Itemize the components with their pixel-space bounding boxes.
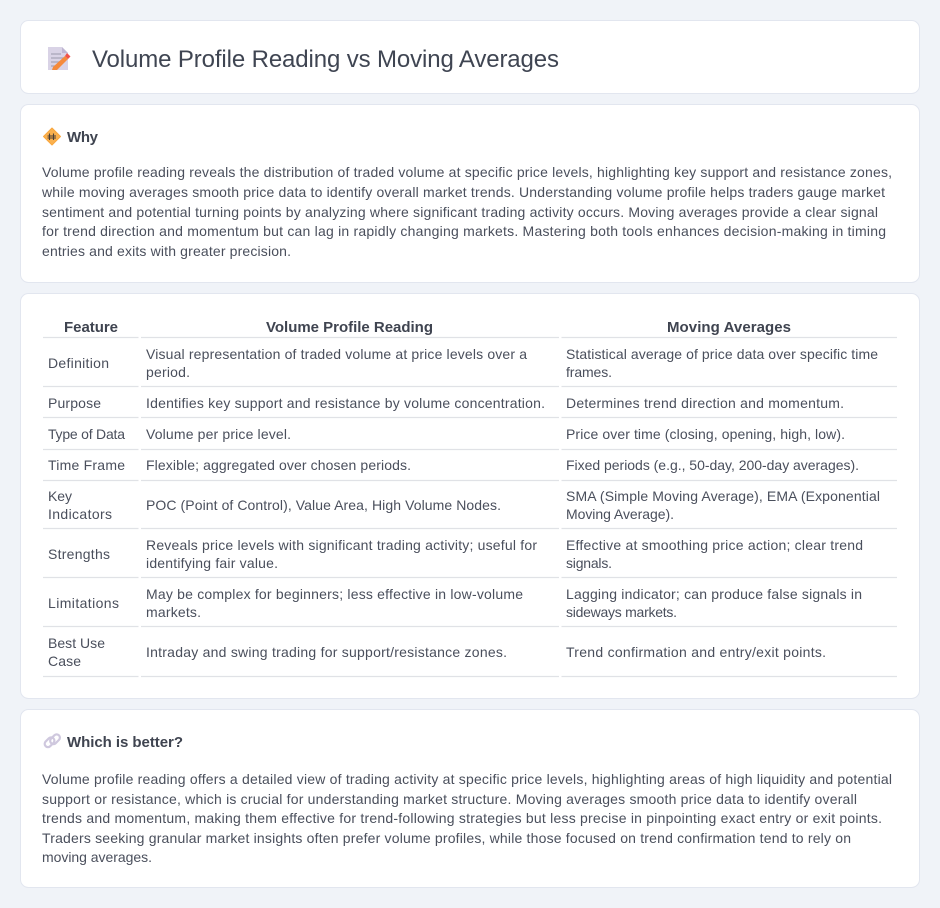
row: key indicators: SMA (Simple Moving Average), EMA (Exponential bbox=[566, 488, 880, 504]
row: type of data: Type of Data bbox=[48, 426, 125, 442]
row: strengths: signals. bbox=[566, 555, 612, 571]
text block: which is better paragraph: Volume profile reading offers a detailed view of trading activity at specific price levels, highlighting areas of high liquidity and potential bbox=[42, 771, 892, 787]
row: type of data: Price over time (closing, opening, high, low). bbox=[566, 426, 845, 442]
row: key indicators: Indicators bbox=[48, 506, 112, 522]
row: definition: Visual representation of traded volume at price levels over a bbox=[146, 346, 527, 362]
panel: why bbox=[20, 104, 920, 282]
row: purpose: Determines trend direction and momentum. bbox=[566, 395, 844, 411]
row: time frame bbox=[48, 457, 859, 473]
row: best use case bbox=[48, 635, 826, 669]
row: purpose: Identifies key support and resistance by volume concentration. bbox=[146, 395, 545, 411]
text block: why paragraph bbox=[41, 164, 892, 259]
row: time frame: Flexible; aggregated over chosen periods. bbox=[146, 457, 411, 473]
row: strengths: Effective at smoothing price action; clear trend bbox=[566, 537, 863, 553]
panel: header bbox=[20, 20, 920, 94]
row: time frame: Time Frame bbox=[48, 457, 125, 473]
table header row: Volume Profile Reading bbox=[266, 319, 433, 336]
text block: which is better paragraph bbox=[42, 771, 892, 865]
text block: why paragraph: for trend direction and momentum but can lag in rapidly changing markets. Mastering both tools enhances decision-making in timing bbox=[42, 223, 886, 239]
row: definition: Statistical average of price data over specific time bbox=[566, 346, 878, 362]
row: time frame: Fixed periods (e.g., 50-day, 200-day averages). bbox=[566, 457, 859, 473]
row: strengths: Strengths bbox=[48, 546, 110, 562]
panel: which is better bbox=[20, 710, 920, 888]
row: strengths bbox=[48, 537, 863, 571]
title: Volume Profile Reading vs Moving Averages bbox=[92, 46, 559, 73]
text block: why paragraph: while moving averages smooth price data to identify overall market trends. Understanding volume profile helps traders gauge market bbox=[41, 184, 885, 200]
row: type of data: Volume per price level. bbox=[146, 426, 291, 442]
text block: which is better paragraph: Traders seeking granular market insights often prefer volume profiles, while those focused on trend confirmation tend to rely on bbox=[42, 830, 851, 846]
row: limitations: May be complex for beginners; less effective in low-volume bbox=[146, 586, 523, 602]
text block: which is better paragraph: support or resistance, which is crucial for understanding market structure. Moving averages smooth price data to identify overall bbox=[42, 791, 857, 807]
row: strengths: identifying fair value. bbox=[146, 555, 278, 571]
row: best use case: Case bbox=[48, 653, 81, 669]
row: limitations bbox=[48, 586, 862, 620]
row: strengths: Reveals price levels with significant trading activity; useful for bbox=[146, 537, 537, 553]
row: limitations: sideways markets. bbox=[566, 604, 677, 620]
table header row: Moving Averages bbox=[667, 319, 791, 336]
table header row: Feature bbox=[64, 319, 118, 336]
row: definition: period. bbox=[146, 364, 190, 380]
row: key indicators: POC (Point of Control), Value Area, High Volume Nodes. bbox=[146, 497, 501, 513]
row: limitations: Lagging indicator; can produce false signals in bbox=[566, 586, 862, 602]
row: definition: Definition bbox=[48, 355, 109, 371]
text block: which is better paragraph: moving averages. bbox=[42, 849, 152, 865]
row: definition bbox=[48, 346, 878, 380]
row: key indicators bbox=[48, 488, 880, 522]
icon: diamond sign bbox=[44, 128, 60, 145]
text block: why paragraph: Volume profile reading reveals the distribution of traded volume at specific price levels, highlighting key support and resistance zones, bbox=[42, 164, 892, 180]
icon: link bbox=[43, 733, 61, 748]
heading: why: Why bbox=[67, 129, 99, 146]
icon: document with pencil bbox=[48, 47, 70, 70]
table header row bbox=[64, 319, 791, 336]
row: key indicators: Moving Average). bbox=[566, 506, 674, 522]
row: best use case: Intraday and swing trading for support/resistance zones. bbox=[146, 644, 507, 660]
text block: which is better paragraph: trends and momentum, making them effective for trend-following strategies but less precise in pinpointing exact entry or exit points. bbox=[42, 810, 882, 826]
text block: why paragraph: sentiment and potential turning points by analyzing where significant trading activity occurs. Moving averages provide a clear signal bbox=[42, 204, 878, 220]
row: definition: frames. bbox=[566, 364, 612, 380]
row: purpose bbox=[48, 395, 844, 411]
row: limitations: Limitations bbox=[48, 595, 119, 611]
heading: which is better: Which is better? bbox=[67, 734, 183, 751]
row: best use case: Trend confirmation and entry/exit points. bbox=[566, 644, 826, 660]
panel: comparison table bbox=[20, 294, 920, 698]
row: best use case: Best Use bbox=[48, 635, 105, 651]
row: key indicators: Key bbox=[48, 488, 72, 504]
row: purpose: Purpose bbox=[48, 395, 101, 411]
text block: why paragraph: entries and exits with greater precision. bbox=[42, 243, 291, 259]
row: limitations: markets. bbox=[146, 604, 201, 620]
row: type of data bbox=[48, 426, 845, 442]
